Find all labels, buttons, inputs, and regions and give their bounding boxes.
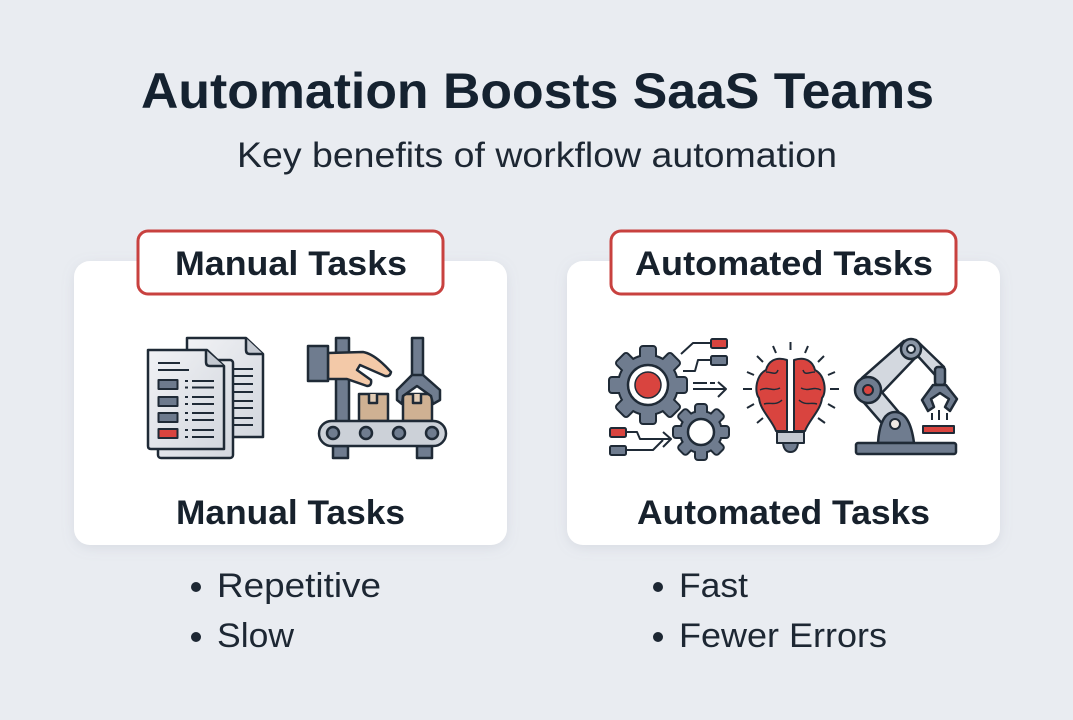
card background: automated [567,261,1000,545]
bullet list: manual: Slow [217,617,294,655]
panel: manual tasks [74,231,507,545]
panel: automated tasks [567,231,1000,545]
icon: brain light bulb [743,342,839,452]
badge: manual tasks: Manual Tasks [175,245,407,283]
bullet list: automated [653,567,887,655]
icon: documents [148,338,263,458]
badge: manual tasks [138,231,443,294]
bullet list: automated: Fewer Errors [679,617,887,655]
title: Automation Boosts SaaS Teams [141,63,934,119]
label: automated tasks: Automated Tasks [637,494,930,532]
icon: robot arm [855,339,957,454]
bullet list: manual [191,567,381,655]
icon: gears and connectors [610,339,728,459]
icon: hand on conveyor [308,338,446,458]
badge: automated tasks [611,231,956,294]
subtitle: Key benefits of workflow automation [237,136,837,175]
bullet list: automated: Fast [679,567,749,605]
card background: manual [74,261,507,545]
bullet list: manual: Repetitive [217,567,381,605]
badge: automated tasks: Automated Tasks [635,245,933,283]
label: manual tasks: Manual Tasks [176,494,405,532]
